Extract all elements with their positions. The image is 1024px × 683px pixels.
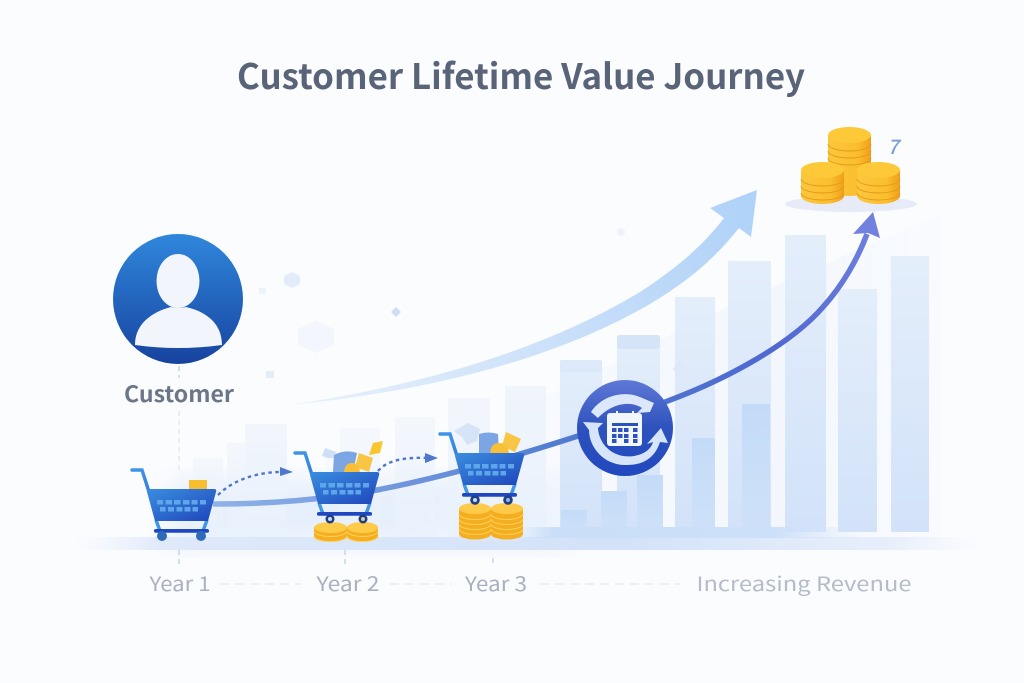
icon: customer avatar [113, 234, 243, 364]
icon: calendar [607, 411, 642, 446]
cart: year 2 [295, 441, 383, 524]
coins: year 2 [311, 522, 381, 543]
light blue growth arrow [290, 190, 757, 405]
dark blue growth arrow [213, 212, 880, 504]
title: Customer Lifetime Value Journey [237, 49, 805, 100]
decorative floating hexagons [259, 228, 685, 378]
cart: year 1 [132, 470, 216, 541]
axis label: year 1: Year 1 [148, 568, 210, 597]
dotted arrow: year 2 to year 3 [378, 453, 438, 471]
coins: large stacks at the top [785, 127, 917, 212]
axis label: year 2: Year 2 [315, 568, 380, 597]
ground band [70, 527, 985, 550]
bar chart: growing revenue bars [170, 215, 940, 545]
axis label: year 3: Year 3 [464, 568, 527, 597]
label: customer: Customer [124, 377, 234, 409]
cart: year 3 [440, 423, 524, 505]
dashed connector lines [179, 366, 680, 584]
axis label: increasing revenue: Increasing Revenue [696, 568, 912, 597]
dotted arrow: year 1 to year 2 [218, 467, 293, 495]
icon: repeat purchase calendar cycle [577, 380, 673, 476]
coins: year 3 [456, 503, 526, 542]
small figure near coins: 7 [887, 131, 902, 160]
